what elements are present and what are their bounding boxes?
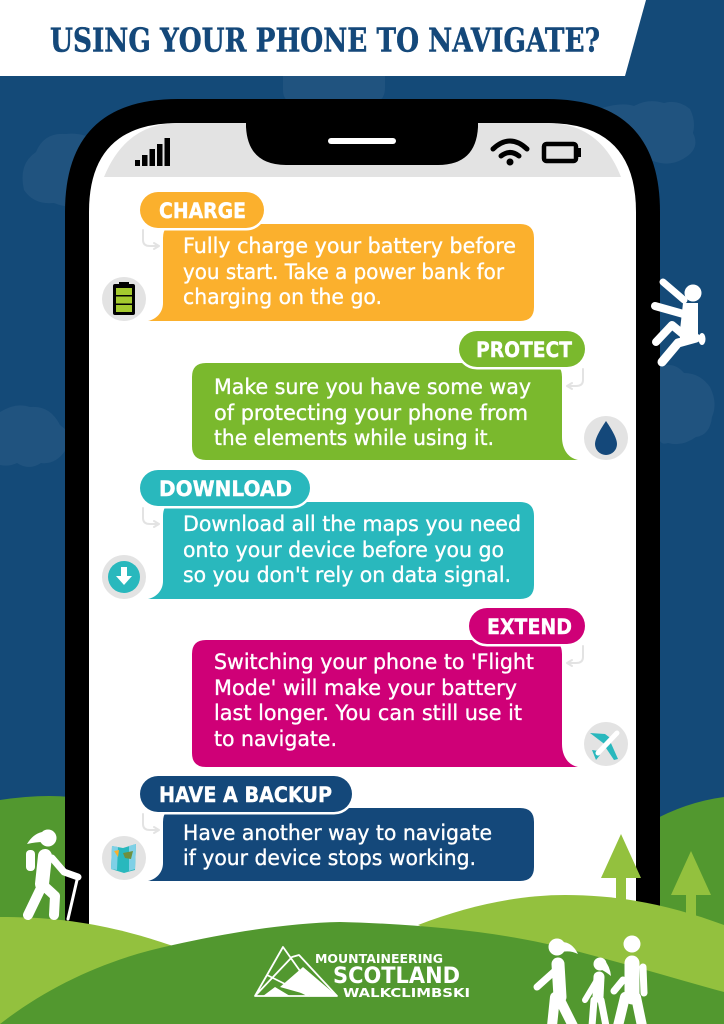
body text: Mode' will make your battery	[214, 676, 517, 700]
body text: Switching your phone to 'Flight	[214, 650, 534, 674]
front dark hill	[0, 922, 724, 1024]
family	[537, 936, 644, 1024]
body text: you start. Take a power bank for	[183, 260, 504, 284]
label: CHARGE	[159, 199, 246, 223]
man	[614, 936, 644, 1024]
body text	[214, 650, 534, 751]
body text: of protecting your phone from	[214, 401, 528, 425]
icon: status battery	[544, 144, 581, 161]
status bar	[104, 123, 621, 177]
phone screen	[89, 123, 636, 1000]
body text	[183, 234, 516, 309]
body text: charging on the go.	[183, 285, 382, 309]
leg low	[662, 338, 696, 362]
label: DOWNLOAD	[159, 477, 292, 501]
ponytail	[27, 832, 43, 844]
body text: onto your device before you go	[183, 538, 504, 562]
leg bent	[656, 325, 684, 342]
body text: Fully charge your battery before	[183, 234, 516, 258]
phone body	[65, 99, 660, 1000]
icon: wifi	[493, 141, 527, 166]
body text: Download all the maps you need	[183, 512, 521, 536]
title: USING YOUR PHONE TO NAVIGATE?	[50, 20, 600, 60]
pole	[68, 880, 77, 919]
icon: map	[102, 836, 146, 880]
arrow	[143, 230, 159, 249]
body text	[214, 375, 531, 450]
woman	[537, 938, 578, 1024]
label pill	[140, 776, 352, 812]
banner shape	[0, 0, 646, 76]
label pill	[459, 331, 585, 367]
body text: last longer. You can still use it	[214, 701, 522, 725]
bubble	[148, 224, 534, 321]
body text: Have another way to navigate	[183, 821, 492, 845]
phone	[65, 99, 660, 1000]
head	[684, 284, 702, 302]
bubble	[148, 502, 534, 599]
title banner	[0, 0, 646, 76]
arm side	[655, 306, 687, 315]
arrow	[143, 508, 159, 527]
speaker	[328, 138, 396, 144]
backpack	[26, 850, 35, 871]
arm	[52, 858, 78, 877]
notch	[246, 123, 478, 165]
message: charge	[102, 192, 534, 321]
hills behind the phone	[0, 796, 724, 937]
label pill	[140, 192, 264, 228]
icon: battery	[102, 277, 146, 321]
logo	[255, 947, 470, 1000]
message: download	[102, 470, 534, 599]
left light hill	[0, 917, 185, 1024]
bubble	[148, 808, 534, 881]
body text: the elements while using it.	[214, 426, 494, 450]
climber	[655, 282, 706, 362]
body text: if your device stops working.	[183, 846, 476, 870]
bubble	[192, 363, 578, 460]
icon: water drop	[584, 416, 628, 460]
logo strapline: WALKCLIMBSKI	[343, 986, 470, 1000]
message: extend	[192, 608, 628, 767]
label: PROTECT	[476, 338, 573, 362]
hills in front of the phone	[0, 895, 724, 1024]
icon: download	[102, 555, 146, 599]
body text	[183, 512, 521, 587]
label pill	[469, 608, 585, 644]
hiker	[26, 830, 78, 919]
logo mountains	[255, 947, 337, 996]
foot	[698, 333, 706, 345]
legs	[28, 885, 55, 915]
child	[585, 958, 611, 1024]
message: have a backup	[102, 776, 534, 881]
body text: Make sure you have some way	[214, 375, 531, 399]
icon: aeroplane	[584, 722, 628, 766]
arrow	[567, 646, 583, 666]
arrow	[567, 369, 583, 389]
body text: so you don't rely on data signal.	[183, 563, 511, 587]
trees	[601, 834, 711, 920]
label pill	[140, 470, 310, 506]
head	[40, 830, 56, 846]
logo name: SCOTLAND	[333, 964, 460, 989]
label: EXTEND	[487, 615, 572, 639]
clouds	[0, 76, 715, 467]
torso	[42, 856, 45, 884]
torso	[680, 303, 698, 345]
arrow	[143, 814, 159, 833]
bubble	[192, 640, 578, 767]
right light hill	[418, 895, 724, 1000]
body text: to navigate.	[214, 727, 337, 751]
label: HAVE A BACKUP	[159, 783, 332, 807]
icon: signal bars	[135, 138, 170, 166]
logo text: MOUNTAINEERING	[315, 952, 443, 966]
arm up	[663, 282, 684, 300]
message: protect	[192, 331, 628, 460]
body text	[183, 821, 492, 870]
